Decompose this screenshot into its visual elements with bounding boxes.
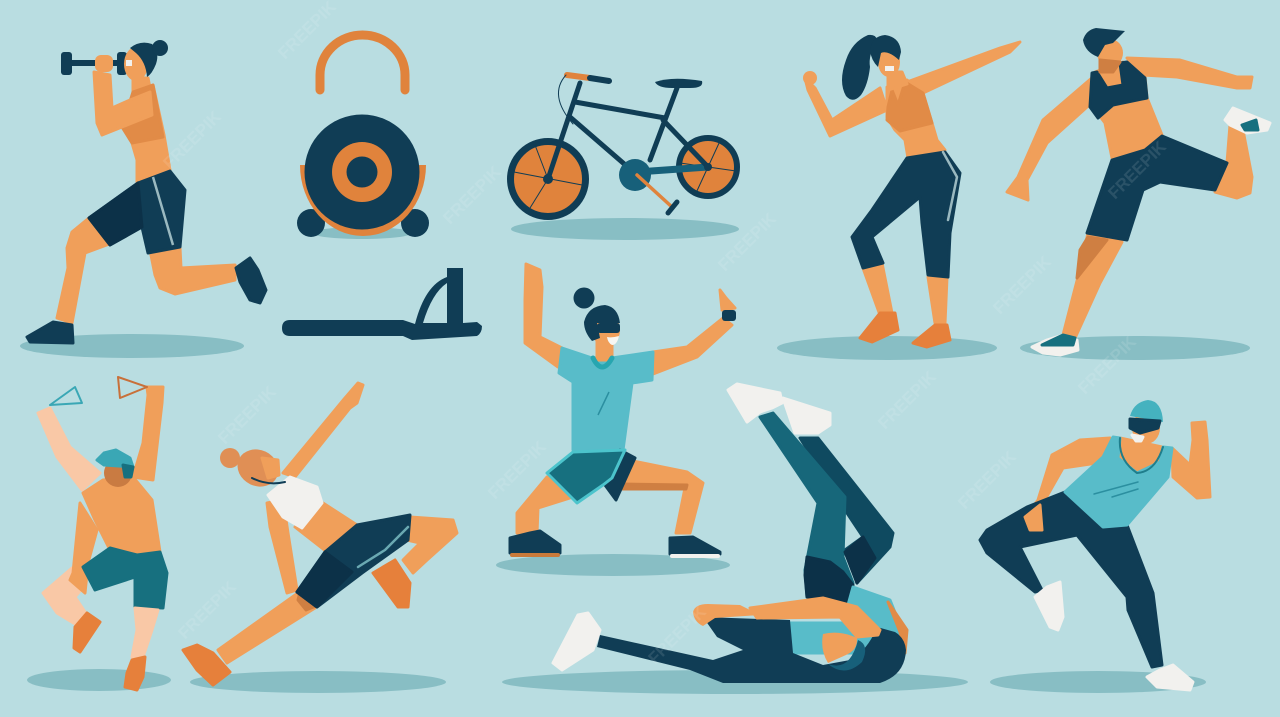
head: [231, 443, 285, 493]
shirt: [790, 587, 902, 653]
knee: [693, 604, 760, 626]
arms: [283, 383, 363, 477]
head: [1097, 39, 1123, 67]
torso: [83, 477, 160, 555]
leggings: [980, 492, 1162, 667]
far leg: [800, 438, 893, 583]
head: [592, 313, 620, 347]
raised shoes: [728, 384, 782, 422]
torso: [1093, 62, 1162, 158]
shoes: [1225, 108, 1270, 133]
hand: [1025, 505, 1042, 530]
neck: [888, 72, 907, 90]
shorts: [297, 515, 410, 607]
equipment: bicycle: [510, 75, 737, 216]
dumbbell: [61, 52, 127, 75]
shoes: [1035, 582, 1063, 630]
shoes: [74, 613, 100, 652]
torso: [887, 80, 945, 158]
head: [878, 47, 900, 77]
sports bra: [1090, 62, 1147, 118]
figure: woman kicking back: [1007, 28, 1270, 355]
seat: [655, 79, 702, 88]
ground shadows: [20, 218, 1250, 694]
arms: [805, 78, 887, 136]
arms: [1007, 77, 1097, 200]
watermarks: FREEPIK: [1074, 332, 1140, 398]
front long leg: [218, 593, 315, 663]
shoes: [510, 531, 560, 553]
watermarks: FREEPIK: [214, 382, 280, 448]
face: [822, 633, 857, 663]
body and lower leg: [597, 617, 906, 683]
equipment: kettle weight: [297, 35, 429, 237]
watermarks: FREEPIK: [954, 447, 1020, 513]
watermarks: FREEPIK: [484, 437, 550, 503]
equipment: bar: [282, 268, 482, 340]
handlebar: [567, 75, 590, 78]
neck and collar: [597, 335, 612, 360]
figure: dancing woman with ponytail: [803, 35, 1020, 347]
raised leg: [403, 517, 457, 573]
watermarks: FREEPIK: [714, 209, 780, 275]
tank top: [1065, 437, 1172, 527]
wheels: [510, 142, 586, 216]
hand: [95, 55, 113, 72]
left arm: [525, 264, 562, 367]
back edge: [888, 602, 907, 653]
lower shoe: [553, 613, 600, 670]
frame: [548, 83, 708, 179]
ponytail: [842, 35, 877, 100]
torso: [132, 85, 170, 182]
raised leg: [1215, 125, 1252, 198]
shirt: [559, 348, 653, 455]
chest: [1120, 438, 1162, 473]
arms: [1025, 438, 1110, 530]
figure: man with resistance band: [38, 377, 167, 690]
head: [124, 47, 148, 81]
head: [104, 459, 132, 487]
near leg: [760, 413, 853, 603]
watermarks: FREEPIK: [1104, 137, 1170, 203]
wristband: [722, 310, 736, 321]
figure: wide squat in teal shirt: [510, 264, 736, 558]
legs: [517, 477, 570, 533]
hair: [828, 640, 865, 671]
handle: [320, 35, 405, 90]
sports bra: [887, 82, 932, 131]
shorts: [605, 450, 635, 500]
front leg: [57, 218, 112, 323]
top: [268, 477, 322, 528]
arm: [750, 598, 880, 637]
front leg: [132, 608, 158, 657]
resistance bands: [50, 387, 82, 405]
head: [1132, 412, 1160, 444]
lower legs: [863, 263, 892, 315]
standing leg: [1063, 233, 1122, 338]
watermarks: FREEPIK: [174, 577, 240, 643]
figure: woman leaning and pointing: [183, 383, 457, 685]
left arm: [38, 408, 100, 490]
figure: man in teal tank dancing: [980, 400, 1210, 690]
shoes: [27, 322, 73, 343]
shoes: [860, 313, 898, 342]
back leg: [150, 248, 235, 294]
leggings: [852, 152, 960, 277]
watermarks: FREEPIK: [644, 602, 710, 668]
figure: lunge with dumbbell: [27, 40, 266, 343]
watermarks: FREEPIK: [989, 252, 1055, 318]
right arm: [133, 387, 163, 480]
wheel: [304, 114, 420, 230]
shoes: [183, 645, 230, 685]
chain stay: [637, 167, 708, 172]
right arm: [653, 318, 732, 374]
watermarks: FREEPIK: [159, 107, 225, 173]
figure: woman on back with legs up: [553, 384, 907, 683]
sports bra: [122, 85, 163, 143]
feet: [297, 209, 325, 237]
back leg: [43, 568, 87, 627]
torso: [295, 503, 357, 552]
shorts: [1087, 136, 1227, 240]
watermarks: FREEPIK: [874, 367, 940, 433]
shorts: [89, 171, 185, 253]
watermarks: [159, 0, 1170, 668]
crank and pedal: [619, 159, 651, 191]
shorts: [83, 548, 167, 608]
arm: [94, 72, 152, 135]
watermarks: FREEPIK: [439, 162, 505, 228]
cradle: [300, 165, 426, 236]
